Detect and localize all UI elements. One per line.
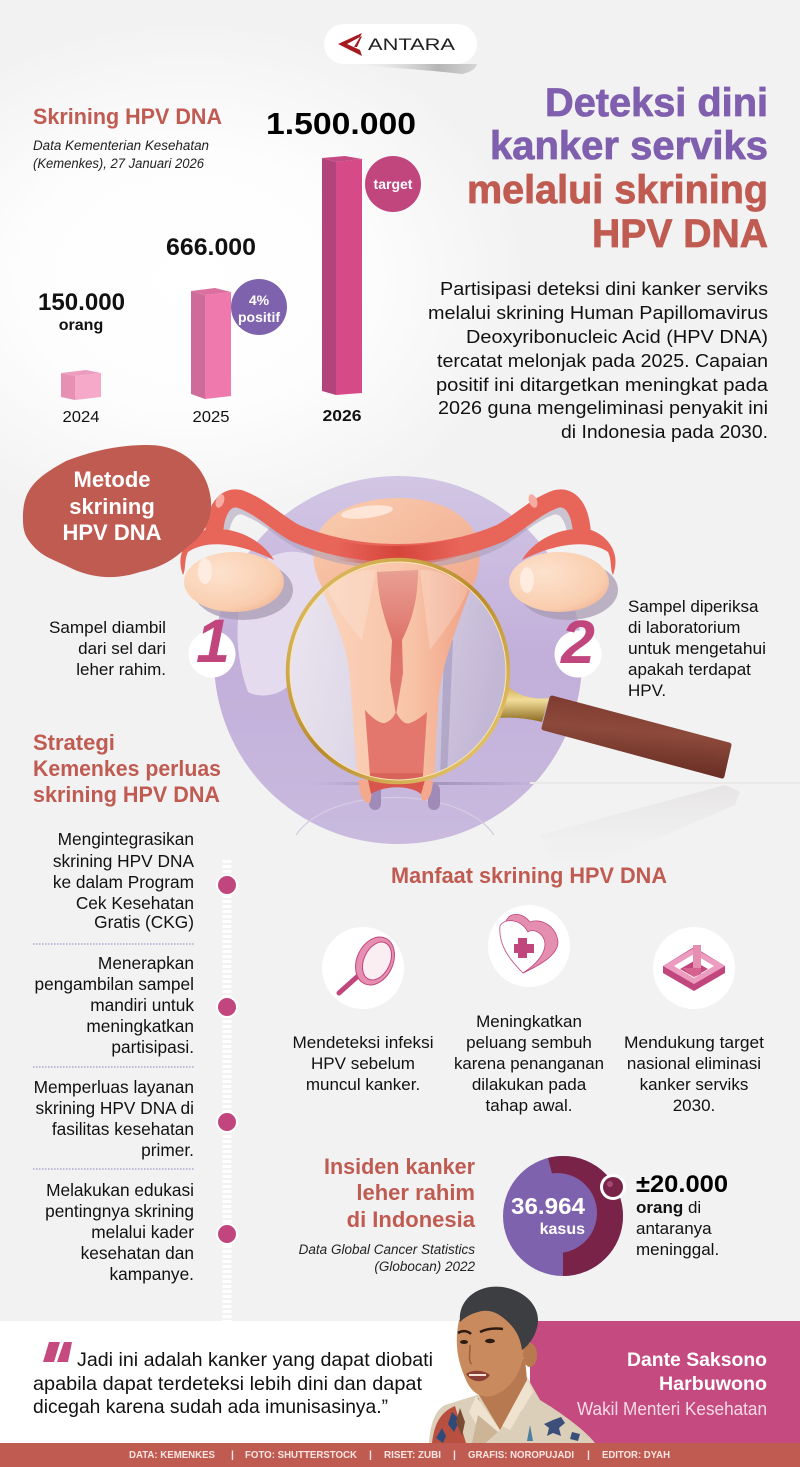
heading: Skrining HPV DNA (33, 104, 222, 171)
bar 2024: orang (59, 317, 103, 334)
heading: insiden (299, 1154, 476, 1274)
strategy 3: fasilitas kesehatan (52, 1119, 194, 1139)
benefit 1 (292, 927, 434, 1094)
step 1 (49, 607, 236, 679)
strategy 3: skrining HPV DNA di (36, 1098, 194, 1118)
benefit 1: Mendeteksi infeksi (292, 1033, 434, 1052)
stat: deaths (636, 1171, 728, 1259)
step 2: di laboratorium (628, 618, 740, 637)
badge: target (365, 156, 421, 212)
badge: 4% positif: positif (238, 309, 280, 325)
strategy 4: kampanye. (109, 1264, 194, 1284)
intro paragraph: Deoxyribonucleic Acid (HPV DNA) (466, 326, 768, 347)
donut chart: 36.964 (511, 1193, 585, 1219)
strategy 1: ke dalam Program (53, 872, 194, 892)
timeline (216, 860, 238, 1321)
heading: Manfaat: Manfaat skrining HPV DNA (391, 863, 667, 888)
badge: 4% positif: 4% (249, 292, 270, 308)
magnifier handle (498, 682, 729, 776)
benefit 2: dilakukan pada (472, 1075, 587, 1094)
blob: Metode skrining HPV DNA: skrining (69, 494, 155, 519)
strategy list (34, 829, 194, 1284)
step 2: untuk mengetahui (628, 639, 766, 658)
benefit 3: 2030. (673, 1096, 715, 1115)
bar 2024: 2024 (62, 409, 100, 426)
benefit 3: nasional eliminasi (627, 1054, 761, 1073)
bar 2024: 150.000 (38, 289, 125, 316)
icon: magnifier (339, 931, 402, 993)
stat: deaths: antaranya (636, 1219, 712, 1238)
neck and face (476, 1358, 527, 1430)
strategy 2: pengambilan sampel (35, 974, 194, 994)
step 2: apakah terdapat (628, 660, 751, 679)
footer credits: RISET: ZUBI (384, 1449, 441, 1461)
portrait (429, 1287, 595, 1443)
benefit 1: HPV sebelum (311, 1054, 415, 1073)
illustration: uterus and magnifier (180, 476, 800, 880)
title: melalui skrining (467, 168, 768, 212)
benefit 2: karena penanganan (454, 1054, 604, 1073)
donut chart (503, 1156, 626, 1276)
step 2: 2 (560, 608, 595, 676)
heading: insiden: leher rahim (356, 1180, 475, 1205)
strategy 4 (45, 1180, 194, 1284)
speaker name: Dante Saksono (627, 1350, 767, 1371)
bar 2025 (166, 234, 256, 426)
bar 2025: 2025 (192, 409, 230, 426)
footer credits: | (587, 1449, 590, 1461)
heading: strategi: Strategi (33, 730, 115, 755)
benefit 2 (454, 905, 604, 1115)
footer credits: | (231, 1449, 234, 1461)
footer credits (0, 1443, 800, 1467)
shirt (429, 1377, 595, 1443)
step 1: dari sel dari (78, 639, 166, 658)
footer credits: FOTO: SHUTTERSTOCK (245, 1449, 357, 1461)
strategy 3: Memperluas layanan (34, 1077, 194, 1097)
stat: deaths: meninggal. (636, 1240, 719, 1259)
strategy 2 (35, 953, 194, 1057)
stat: deaths: orang di (636, 1198, 701, 1217)
strategy 1 (53, 829, 194, 932)
bar 2024 (38, 289, 125, 426)
bar chart (38, 106, 421, 426)
step 1: leher rahim. (76, 660, 166, 679)
step 2: HPV. (628, 681, 666, 700)
badge: 4% positif (231, 279, 287, 335)
intro paragraph: 2026 guna mengeliminasi penyakit ini (438, 397, 768, 418)
strategy 2: partisipasi. (111, 1037, 194, 1057)
strategy 4: kesehatan dan (81, 1243, 194, 1263)
blob: Metode skrining HPV DNA: Metode (74, 467, 150, 492)
heading: strategi (33, 730, 221, 807)
heading: insiden: Insiden kanker (324, 1154, 475, 1179)
title: Deteksi dini (545, 81, 768, 125)
intro paragraph: Partisipasi deteksi dini kanker serviks (440, 278, 768, 299)
footer credits: | (369, 1449, 372, 1461)
right fallopian tube and ovary (398, 493, 618, 620)
quote mark (43, 1342, 72, 1362)
logo: ANTARA: ANTARA (368, 35, 456, 54)
mouth (466, 1371, 490, 1381)
uterus legs (358, 780, 434, 804)
footer credits: EDITOR: DYAH (602, 1449, 670, 1461)
heading: insiden: (Globocan) 2022 (374, 1259, 475, 1274)
strategy 2: Menerapkan (98, 953, 194, 973)
benefit 1: muncul kanker. (306, 1075, 420, 1094)
brows and eyes (458, 1328, 503, 1334)
step 2: Sampel diperiksa (628, 597, 759, 616)
quote text: dicegah karena sudah ada imunisasinya.” (33, 1396, 388, 1418)
magnifier lens (288, 555, 508, 785)
strategy 3: primer. (141, 1140, 194, 1160)
floor shadows (310, 782, 800, 880)
benefit 2: tahap awal. (486, 1096, 572, 1115)
logo: ANTARA (324, 24, 477, 74)
strategy 4: melalui kader (91, 1222, 194, 1242)
speaker name (577, 1350, 767, 1419)
quote text: apabila dapat terdeteksi lebih dini dan dapat (33, 1373, 423, 1395)
footer credits: GRAFIS: NOROPUJADI (468, 1449, 574, 1461)
hair (460, 1287, 538, 1350)
left fallopian tube and ovary (180, 493, 398, 620)
heading: Skrining HPV DNA: (Kemenkes), 27 Januari 2026 (33, 156, 204, 171)
heading: strategi: Kemenkes perluas (33, 756, 221, 781)
benefit 3: Mendukung target (624, 1033, 764, 1052)
heading: insiden: Data Global Cancer Statistics (299, 1242, 475, 1257)
heading: Skrining HPV DNA: Data Kementerian Kesehatan (33, 138, 209, 153)
strategy 3 (34, 1077, 194, 1160)
intro paragraph: di Indonesia pada 2030. (561, 421, 768, 442)
benefit 2: Meningkatkan (476, 1012, 582, 1031)
bar 2026 (266, 106, 416, 425)
footer credits: | (453, 1449, 456, 1461)
strategy 1: Mengintegrasikan (58, 829, 194, 849)
strategy 1: Cek Kesehatan (76, 893, 194, 913)
donut chart: kasus (540, 1221, 585, 1238)
step 2 (554, 597, 766, 700)
intro paragraph (428, 278, 769, 442)
heading: Skrining HPV DNA: Skrining HPV DNA (33, 104, 222, 129)
strategy 4: pentingnya skrining (45, 1201, 194, 1221)
heading: strategi: skrining HPV DNA (33, 782, 220, 807)
strategy 1: Gratis (CKG) (94, 912, 194, 932)
speaker name: Harbuwono (659, 1374, 767, 1395)
benefit 2: peluang sembuh (466, 1033, 592, 1052)
intro paragraph: melalui skrining Human Papillomavirus (428, 302, 768, 323)
title: kanker serviks (490, 124, 768, 168)
icon: checkbox target (663, 945, 725, 991)
bar 2025: 666.000 (166, 234, 256, 261)
strategy 1: skrining HPV DNA (53, 851, 194, 871)
blob: Metode skrining HPV DNA (23, 445, 211, 577)
step 1: Sampel diambil (49, 618, 166, 637)
icon: heart with cross (500, 914, 558, 973)
stat: deaths: ±20.000 (636, 1171, 728, 1198)
blob: Metode skrining HPV DNA: HPV DNA (62, 520, 162, 545)
quote band (0, 1321, 800, 1443)
title (467, 81, 768, 256)
strategy 2: meningkatkan (86, 1016, 194, 1036)
speaker name: Wakil Menteri Kesehatan (577, 1399, 767, 1419)
quote text: Jadi ini adalah kanker yang dapat diobati (77, 1349, 433, 1371)
badge: target: target (374, 176, 413, 192)
benefit 3 (624, 927, 764, 1115)
strategy 2: mandiri untuk (90, 995, 194, 1015)
quote text (33, 1349, 433, 1418)
heading: insiden: di Indonesia (347, 1207, 476, 1232)
uterus fundus (313, 498, 479, 610)
intro paragraph: positif ini ditargetkan meningkat pada (436, 374, 769, 395)
benefit 3: kanker serviks (640, 1075, 748, 1094)
footer credits: DATA: KEMENKES (129, 1449, 215, 1461)
title: HPV DNA (592, 212, 768, 256)
bar 2026: 1.500.000 (266, 106, 416, 141)
step 1: 1 (196, 607, 230, 675)
bar 2026: 2026 (322, 408, 362, 425)
intro paragraph: tercatat melonjak pada 2025. Capaian (437, 350, 768, 371)
strategy 4: Melakukan edukasi (46, 1180, 194, 1200)
